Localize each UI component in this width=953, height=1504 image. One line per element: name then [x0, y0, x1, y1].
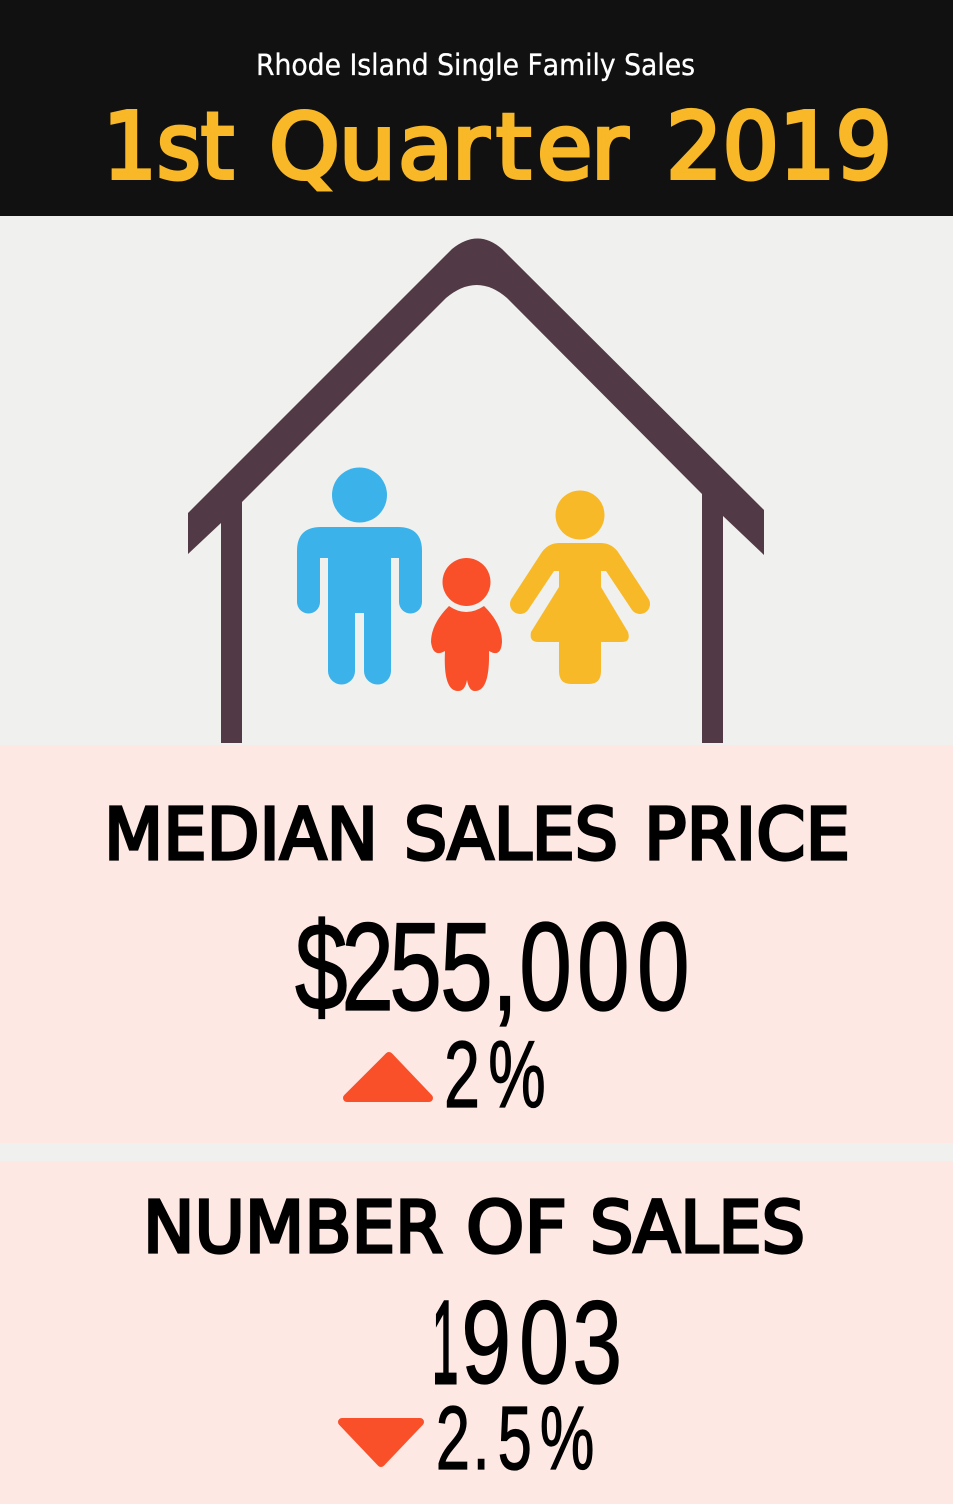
title: Quarter	[269, 95, 628, 200]
icon: woman	[510, 490, 650, 684]
panel: header	[0, 0, 953, 216]
heading: number of sales: NUMBER	[143, 1186, 443, 1269]
value: sales count: 903	[461, 1277, 622, 1409]
heading: number of sales	[143, 1186, 805, 1269]
heading: median sales price: SALES	[404, 793, 618, 876]
title: 2019	[666, 93, 892, 200]
heading: median sales price: MEDIAN	[104, 793, 378, 876]
heading: median sales price: PRICE	[644, 793, 850, 876]
subtitle: Rhode Island Single Family Sales	[256, 48, 695, 82]
value: price change: 2%	[444, 1022, 546, 1128]
panel: median sales price	[0, 745, 953, 1143]
heading: median sales price	[104, 793, 850, 876]
icon: man	[297, 468, 422, 684]
heading: number of sales: OF	[466, 1186, 567, 1269]
value: median price: $255,000	[295, 897, 690, 1037]
title	[103, 93, 892, 200]
icon: up arrow	[347, 1056, 429, 1098]
panel: number of sales	[0, 1161, 953, 1504]
icon: house outline	[188, 238, 764, 743]
title: 1st	[103, 93, 234, 200]
heading: number of sales: SALES	[590, 1186, 805, 1269]
icon: down arrow	[342, 1422, 420, 1463]
illustration: family in house	[188, 238, 764, 743]
value: sales change: 2.5%	[436, 1388, 594, 1489]
value: sales count: 1	[432, 1278, 458, 1409]
icon: child	[431, 558, 502, 691]
